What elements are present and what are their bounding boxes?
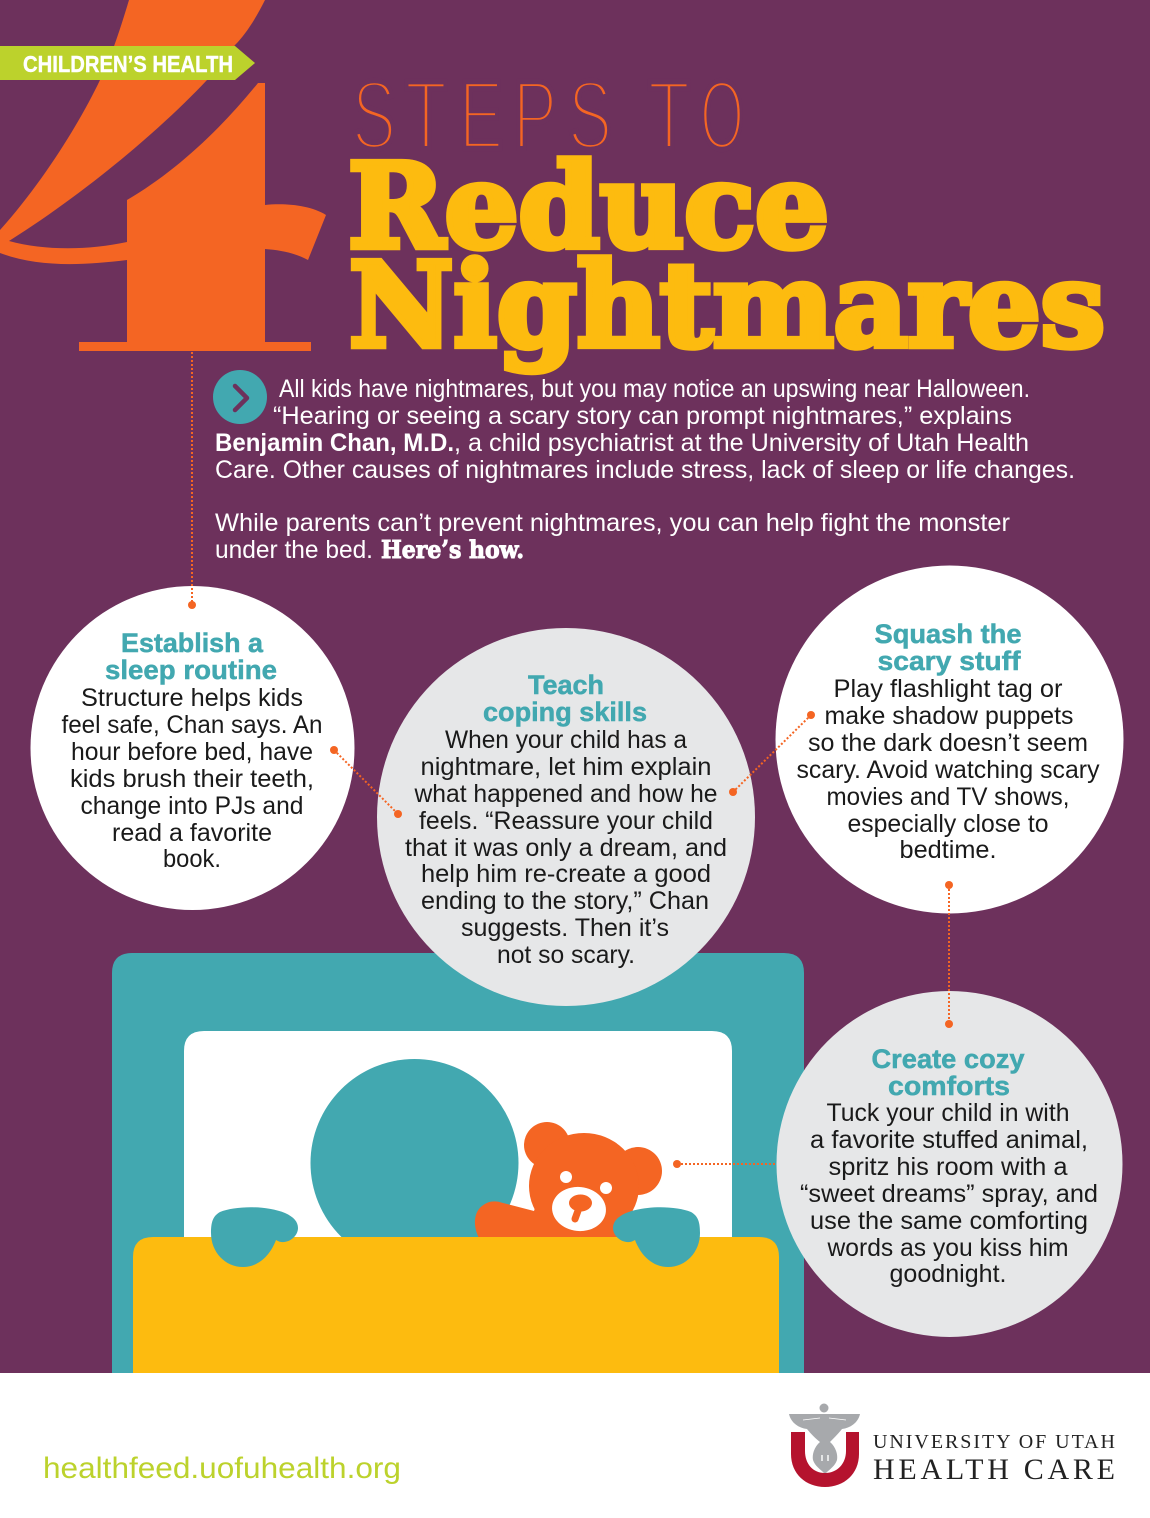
title: O <box>700 60 744 170</box>
blanket <box>133 1237 779 1373</box>
bed illustration <box>112 953 804 1373</box>
intro text: While parents can’t prevent nightmares, you can help fight the monster <box>215 509 1010 537</box>
footer url: healthfeed.uofuhealth.org <box>43 1452 401 1485</box>
title: S <box>568 60 612 170</box>
title: Nightmares <box>349 238 1105 374</box>
circle: squash the scary stuff: scary. Avoid watching scary <box>796 756 1100 784</box>
teddy bear <box>475 1122 662 1240</box>
circle: establish a sleep routine: feel safe, Chan says. An <box>62 711 322 739</box>
intro text: Care. Other causes of nightmares include stress, lack of sleep or life changes. <box>215 456 1075 484</box>
circle: squash the scary stuff: make shadow puppets <box>824 702 1074 730</box>
title <box>348 60 1105 374</box>
intro text <box>215 375 1075 564</box>
right hand <box>613 1207 700 1267</box>
circle: establish a sleep routine: hour before bed, have <box>71 738 313 766</box>
circle: squash the scary stuff: bedtime. <box>900 836 996 864</box>
title: Reduce <box>348 139 829 275</box>
pillow <box>184 1031 732 1240</box>
circle: teach coping skills: nightmare, let him explain <box>420 753 712 781</box>
circle: teach coping skills: ending to the story,” Chan <box>421 887 709 915</box>
logo: university of utah health care: HEALTH CARE <box>873 1453 1115 1486</box>
circle: squash the scary stuff: especially close to <box>848 810 1048 838</box>
circle: establish a sleep routine: sleep routine <box>105 655 277 685</box>
intro text: “Hearing or seeing a scary story can prompt nightmares,” explains <box>273 402 1012 430</box>
title: P <box>513 60 557 170</box>
logo: university of utah health care <box>789 1404 1115 1487</box>
connector: numeral to step one <box>188 352 196 609</box>
logo: university of utah health care: UNIVERSITY OF UTAH <box>873 1431 1115 1453</box>
circle: establish a sleep routine: book. <box>163 845 221 873</box>
circle: teach coping skills: Teach <box>528 670 604 700</box>
circle: squash the scary stuff <box>776 566 1124 914</box>
intro text: All kids have nightmares, but you may notice an upswing near Halloween. <box>279 375 1030 403</box>
circle: create cozy comforts: spritz his room with a <box>828 1153 1068 1181</box>
circle: squash the scary stuff: scary stuff <box>878 646 1022 676</box>
connector: step three to step four <box>945 881 953 1028</box>
intro text: under the bed. <box>215 536 373 564</box>
circle: create cozy comforts: goodnight. <box>890 1260 1006 1288</box>
icon: red U <box>791 1432 859 1487</box>
left hand <box>211 1207 298 1267</box>
connector: step four to teddy bear <box>673 1160 777 1168</box>
circle: teach coping skills: When your child has a <box>445 726 687 754</box>
title: T <box>405 60 447 170</box>
circle: create cozy comforts <box>776 991 1122 1337</box>
circle: teach coping skills: help him re-create a good <box>421 860 711 888</box>
circle: create cozy comforts: use the same comforting <box>810 1207 1088 1235</box>
icon: arrow badge <box>213 370 267 424</box>
circle: squash the scary stuff: so the dark doesn’t seem <box>808 729 1088 757</box>
title: T <box>648 60 690 170</box>
circle: teach coping skills: suggests. Then it’s <box>461 914 669 942</box>
intro text: Benjamin Chan, M.D. <box>215 429 454 457</box>
circle: create cozy comforts: comforts <box>888 1071 1010 1101</box>
intro text: Here’s how. <box>381 535 524 564</box>
circle: teach coping skills: feels. “Reassure your child <box>419 807 713 835</box>
title: E <box>459 60 503 170</box>
section banner: children's health: CHILDREN’S HEALTH <box>23 51 233 77</box>
circle: establish a sleep routine: Structure helps kids <box>81 684 303 712</box>
circle: create cozy comforts: “sweet dreams” spray, and <box>800 1180 1098 1208</box>
circle: teach coping skills: that it was only a dream, and <box>405 834 727 862</box>
child head <box>310 1059 518 1267</box>
circle: teach coping skills <box>377 628 755 1006</box>
circle: teach coping skills: not so scary. <box>497 941 635 969</box>
numeral 4 <box>0 0 326 351</box>
section banner: children's health <box>0 46 255 80</box>
connector: step one to step two <box>330 746 402 818</box>
circle: establish a sleep routine: change into PJs and <box>80 792 304 820</box>
circle: establish a sleep routine: read a favorite <box>112 819 272 847</box>
circle: squash the scary stuff: Squash the <box>874 619 1022 649</box>
connector: step two to step three <box>729 711 815 796</box>
circle: create cozy comforts: Tuck your child in with <box>826 1099 1070 1127</box>
circle: squash the scary stuff: Play flashlight tag or <box>834 675 1062 703</box>
circle: establish a sleep routine: kids brush their teeth, <box>70 765 314 793</box>
circle: establish a sleep routine: Establish a <box>121 628 264 658</box>
circle: squash the scary stuff: movies and TV shows, <box>826 783 1070 811</box>
title: S <box>352 60 396 170</box>
circle: create cozy comforts: a favorite stuffed animal, <box>810 1126 1088 1154</box>
intro text: , a child psychiatrist at the University of Utah Health <box>454 429 1029 457</box>
icon: caduceus <box>789 1404 860 1473</box>
circle: create cozy comforts: Create cozy <box>872 1044 1024 1074</box>
circle: establish a sleep routine <box>30 586 354 910</box>
circle: teach coping skills: what happened and how he <box>414 780 718 808</box>
headboard <box>112 953 804 1373</box>
footer band <box>0 1373 1150 1518</box>
circle: teach coping skills: coping skills <box>483 697 647 727</box>
circle: create cozy comforts: words as you kiss him <box>827 1234 1068 1262</box>
